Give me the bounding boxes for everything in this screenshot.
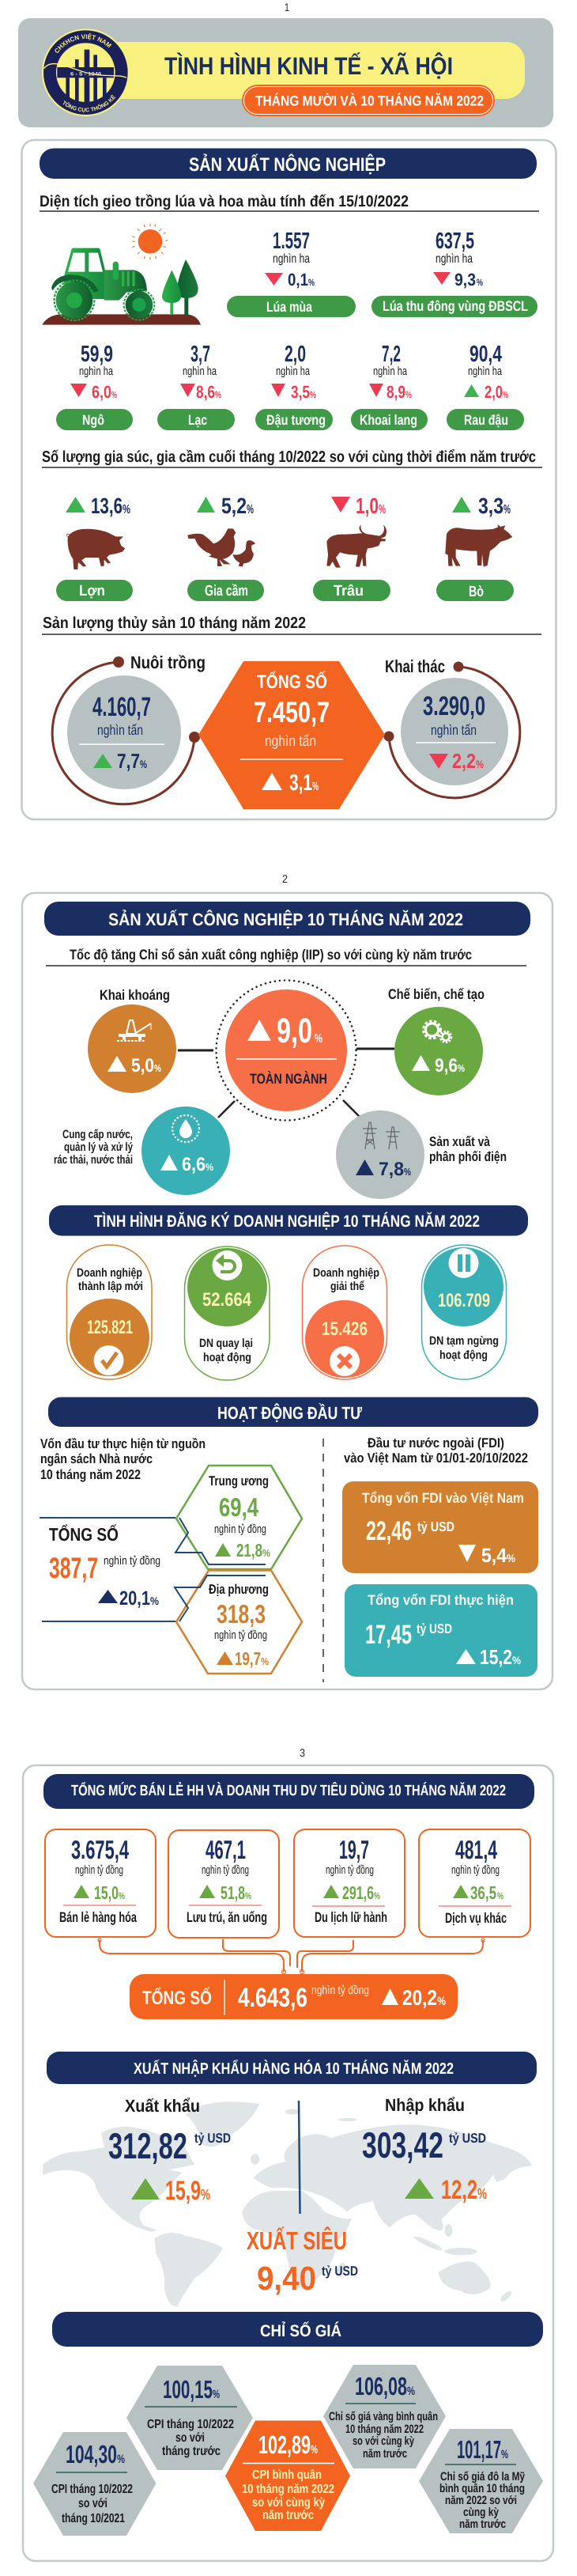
stat: fisheries total hexagon: nghìn tấn bbox=[265, 733, 316, 750]
stat: returning enterprises: hoạt động bbox=[203, 1351, 251, 1364]
panel: retail, trade, prices bbox=[23, 1765, 553, 2561]
stat: travel: nghìn tỷ đồng bbox=[326, 1863, 374, 1877]
page number 2: 2 bbox=[282, 872, 288, 885]
card: realised FDI: 17,45 bbox=[365, 1620, 412, 1650]
hexagon: CPI vs 10/2021: % bbox=[117, 2453, 125, 2466]
stat: Bò: 3,3 bbox=[478, 494, 503, 518]
chart: central IIP circle: % bbox=[315, 1032, 322, 1046]
card: total FDI: % bbox=[507, 1552, 515, 1564]
stat: Gia cầm: Gia cầm bbox=[205, 583, 248, 600]
heading: price index: CHỈ SỐ GIÁ bbox=[260, 2321, 341, 2340]
stat: Lạc bbox=[157, 342, 235, 430]
stat: water and waste: 6,6 bbox=[182, 1154, 206, 1175]
heading: agriculture bbox=[40, 149, 537, 179]
stat: total investment: nghìn tỷ đồng bbox=[104, 1554, 160, 1568]
stat: electricity: Sản xuất và bbox=[429, 1134, 490, 1149]
stat: Lúa thu đông: 9,3 bbox=[454, 270, 476, 289]
heading: agriculture: SẢN XUẤT NÔNG NGHIỆP bbox=[189, 153, 386, 176]
hexagon: CPI vs 10/2021: tháng 10/2021 bbox=[62, 2512, 125, 2525]
heading: retail bbox=[43, 1774, 534, 1809]
text: FDI heading: Đầu tư nước ngoài (FDI) bbox=[368, 1436, 504, 1451]
hexagon: CPI vs previous month bbox=[126, 2366, 253, 2470]
stat: Khoai lang: % bbox=[405, 389, 412, 400]
heading: trade: XUẤT NHẬP KHẨU HÀNG HÓA 10 THÁNG NĂM 2022 bbox=[134, 2060, 454, 2078]
stat: retail goods: nghìn tỷ đồng bbox=[75, 1863, 123, 1877]
hexagon: average CPI: 10 tháng năm 2022 bbox=[242, 2483, 334, 2496]
hexagon: central budget: 69,4 bbox=[219, 1492, 258, 1522]
stat: retail total: TỔNG SỐ bbox=[142, 1987, 212, 2009]
hexagon: CPI vs previous month: % bbox=[213, 2388, 220, 2401]
stat: Lúa thu đông: % bbox=[477, 277, 483, 288]
stat: accommodation and food: Lưu trú, ăn uống bbox=[187, 1909, 267, 1925]
stat: Rau đậu: nghìn ha bbox=[468, 365, 502, 378]
stat: Lạc: 8,6 bbox=[196, 382, 215, 402]
hexagon: USD price index: bình quân 10 tháng bbox=[439, 2482, 525, 2495]
heading: investment: HOẠT ĐỘNG ĐẦU TƯ bbox=[217, 1403, 363, 1423]
stat: Bò: Bò bbox=[469, 584, 484, 600]
stat: total investment: % bbox=[150, 1594, 159, 1607]
hexagon: USD price index: Chỉ số giá đô la Mỹ bbox=[440, 2470, 526, 2483]
hexagon: local budget: nghìn tỷ đồng bbox=[214, 1628, 267, 1642]
card: realised FDI: tỷ USD bbox=[417, 1621, 452, 1636]
stat: retail goods: % bbox=[119, 1890, 125, 1901]
hexagon: CPI vs 10/2021 bbox=[33, 2432, 157, 2536]
stat: total investment: 387,7 bbox=[49, 1552, 98, 1584]
stat: aquaculture circle: 4.160,7 bbox=[92, 692, 151, 722]
stat: mining: % bbox=[154, 1062, 161, 1074]
stat: Lúa thu đông: Lúa thu đông vùng ĐBSCL bbox=[383, 298, 528, 314]
stat: new enterprises: 125.821 bbox=[87, 1317, 133, 1338]
hexagon: average CPI bbox=[225, 2420, 350, 2531]
stat: Rau đậu: Rau đậu bbox=[464, 412, 508, 428]
stat: capture fisheries circle: nghìn tấn bbox=[431, 722, 477, 738]
stat: Lúa mùa: 1.557 bbox=[273, 229, 310, 254]
heading: investment bbox=[48, 1397, 538, 1427]
card: total FDI: 5,4 bbox=[481, 1545, 507, 1567]
header banner bbox=[18, 18, 553, 127]
stat: travel: % bbox=[374, 1890, 380, 1901]
stat: Đậu tương: Đậu tương bbox=[266, 412, 326, 428]
stat: returning enterprises bbox=[185, 1246, 270, 1380]
card: total FDI: tỷ USD bbox=[417, 1519, 454, 1534]
stat: Ngô bbox=[56, 342, 133, 430]
hexagon: central budget: nghìn tỷ đồng bbox=[214, 1523, 266, 1536]
stat: returning enterprises: DN quay lại bbox=[199, 1337, 253, 1350]
icon: pause bbox=[449, 1248, 479, 1278]
stat: water and waste: rác thải, nước thải bbox=[54, 1153, 133, 1167]
stat: suspended enterprises: 106.709 bbox=[438, 1290, 490, 1311]
stat: retail goods: 3.675,4 bbox=[71, 1835, 129, 1864]
hexagon: gold price index: năm trước bbox=[363, 2447, 407, 2461]
card: total FDI: Tổng vốn FDI vào Việt Nam bbox=[362, 1490, 524, 1506]
stat: Lạc: % bbox=[215, 389, 221, 400]
stat: capture fisheries circle: 3.290,0 bbox=[423, 691, 485, 721]
stat: other services: 36,5 bbox=[470, 1882, 496, 1903]
hexagon: local budget: % bbox=[261, 1655, 269, 1667]
stat: Trâu: Trâu bbox=[334, 583, 364, 600]
stat: Đậu tương: 2,0 bbox=[285, 342, 306, 367]
stat: Rau đậu bbox=[447, 342, 524, 430]
hexagon: gold price index bbox=[323, 2365, 446, 2468]
stat: suspended enterprises: hoạt động bbox=[439, 1349, 488, 1362]
stat: Bò: % bbox=[503, 503, 511, 516]
stat: exports: 15,9 bbox=[165, 2176, 201, 2206]
stat: Lạc: 3,7 bbox=[190, 342, 210, 367]
stat: Rau đậu: 2,0 bbox=[485, 382, 503, 402]
text: state budget investment: 10 tháng năm 2022 bbox=[40, 1467, 141, 1482]
stat: aquaculture circle bbox=[52, 653, 206, 804]
stat: Rau đậu: 90,4 bbox=[470, 342, 502, 367]
stat: Trâu: 1,0 bbox=[356, 494, 379, 518]
stat: retail total: % bbox=[437, 1995, 446, 2008]
hexagon: local budget bbox=[176, 1571, 302, 1674]
hexagon: gold price index: so với cùng kỳ bbox=[353, 2434, 414, 2448]
stat: manufacturing: 9,6 bbox=[435, 1055, 458, 1076]
hexagon: central budget bbox=[176, 1466, 302, 1569]
stat: accommodation and food: 467,1 bbox=[206, 1835, 246, 1864]
stat: Lợn: Lợn bbox=[79, 583, 105, 600]
stat: accommodation and food: nghìn tỷ đồng bbox=[202, 1863, 249, 1877]
heading: enterprise registration: TÌNH HÌNH ĐĂNG KÝ DOANH NGHIỆP 10 THÁNG NĂM 2022 bbox=[94, 1212, 480, 1231]
hexagon: USD price index: 101,17 bbox=[457, 2435, 501, 2464]
stat: Lạc: Lạc bbox=[188, 412, 207, 428]
stat: retail goods bbox=[45, 1829, 156, 1937]
subheading: planted area: Diện tích gieo trồng lúa và hoa màu tính đến 15/10/2022 bbox=[40, 193, 409, 210]
stat: new enterprises bbox=[66, 1245, 152, 1379]
hexagon: USD price index: % bbox=[501, 2448, 508, 2461]
stat: accommodation and food bbox=[168, 1830, 279, 1938]
hexagon: USD price index: cùng kỳ bbox=[463, 2506, 500, 2519]
stat: electricity: 7,8 bbox=[379, 1159, 404, 1180]
stat: Khoai lang bbox=[351, 342, 428, 430]
stat: retail total: 4.643,6 bbox=[238, 1983, 307, 2013]
stat: Khoai lang: 7,2 bbox=[382, 342, 401, 367]
hexagon: USD price index: năm 2022 so với bbox=[445, 2494, 517, 2507]
hexagon: central budget: Trung ương bbox=[209, 1473, 269, 1488]
icon: buffalo bbox=[326, 524, 387, 568]
stat: manufacturing: Chế biến, chế tạo bbox=[388, 986, 485, 1002]
hexagon: gold price index: % bbox=[407, 2385, 415, 2398]
stat: Ngô: 6,0 bbox=[92, 382, 111, 402]
page number 1: 1 bbox=[285, 1, 289, 13]
stat: Lúa mùa: % bbox=[308, 277, 315, 288]
hexagon: average CPI: CPI bình quân bbox=[252, 2468, 322, 2482]
stat: trade surplus bbox=[247, 2226, 358, 2297]
stat: dissolved enterprises bbox=[302, 1246, 387, 1379]
heading: trade bbox=[47, 2052, 537, 2084]
heading: industrial production bbox=[44, 902, 530, 936]
icon: statistics office logo: 6 - 5 - 1946 bbox=[70, 71, 101, 77]
hexagon: CPI vs 10/2021: 104,30 bbox=[66, 2440, 117, 2468]
stat: water and waste: quản lý và xử lý bbox=[64, 1140, 133, 1154]
stat: Lúa mùa: Lúa mùa bbox=[266, 299, 313, 315]
hexagon: local budget: 318,3 bbox=[217, 1599, 266, 1628]
stat: exports: tỷ USD bbox=[194, 2131, 231, 2146]
stat: total investment: TỔNG SỐ bbox=[49, 1524, 119, 1545]
stat: Đậu tương: nghìn ha bbox=[276, 365, 310, 378]
panel: industry, enterprises, investment bbox=[22, 893, 552, 1689]
heading: industrial production: SẢN XUẤT CÔNG NGHIỆP 10 THÁNG NĂM 2022 bbox=[108, 910, 463, 929]
stat: Lúa mùa bbox=[227, 229, 356, 317]
stat: imports: Nhập khẩu bbox=[385, 2095, 465, 2115]
icon: tractor with sun and trees bbox=[42, 224, 201, 325]
stat: mining: Khai khoáng bbox=[100, 987, 170, 1003]
hexagon: average CPI: năm trước bbox=[262, 2509, 314, 2522]
stat: travel: Du lịch lữ hành bbox=[315, 1909, 387, 1925]
text: state budget investment bbox=[40, 1436, 206, 1482]
stat: capture fisheries circle: Khai thác bbox=[385, 656, 445, 676]
icon: check bbox=[93, 1345, 123, 1375]
stat: Ngô: 59,9 bbox=[81, 342, 113, 367]
stat: imports: 303,42 bbox=[362, 2124, 443, 2166]
stat: Ngô: Ngô bbox=[82, 412, 104, 428]
stat: trade surplus: XUẤT SIÊU bbox=[247, 2226, 347, 2255]
stat: manufacturing: % bbox=[458, 1062, 465, 1074]
stat: Lúa thu đông: 637,5 bbox=[436, 229, 474, 254]
hexagon: USD price index: năm trước bbox=[459, 2517, 506, 2531]
stat: Khoai lang: Khoai lang bbox=[360, 412, 417, 428]
stat: capture fisheries circle: 2,2 bbox=[452, 749, 476, 773]
stat: Lạc: nghìn ha bbox=[183, 365, 217, 378]
hexagon: average CPI: so với cùng kỳ bbox=[252, 2496, 325, 2510]
text: FDI heading: vào Việt Nam từ 01/01-20/10/2022 bbox=[344, 1451, 528, 1466]
stat: Bò bbox=[436, 494, 514, 601]
hexagon: central budget: 21,8 bbox=[236, 1540, 262, 1560]
icon: pig bbox=[66, 529, 125, 569]
subtitle pill: THÁNG MƯỜI VÀ 10 THÁNG NĂM 2022 bbox=[255, 93, 484, 109]
stat: total investment bbox=[49, 1524, 160, 1610]
hexagon: CPI vs previous month: tháng trước bbox=[162, 2445, 221, 2458]
icon: statistics office logo: TỔNG CỤC THỐNG KÊ bbox=[63, 95, 115, 112]
stat: water and waste bbox=[54, 1106, 230, 1195]
stat: fisheries total hexagon: TỔNG SỐ bbox=[257, 671, 327, 693]
chart: central IIP circle bbox=[217, 981, 356, 1120]
icon: return arrow bbox=[212, 1250, 242, 1280]
heading: enterprise registration bbox=[49, 1205, 528, 1235]
stat: returning enterprises: 52.664 bbox=[202, 1289, 252, 1311]
subheading: fisheries: Sản lượng thủy sản 10 tháng năm 2022 bbox=[43, 615, 306, 632]
connectors to total bbox=[98, 1939, 485, 1974]
stat: retail total: 20,2 bbox=[402, 1986, 437, 2010]
stat: Lợn: 13,6 bbox=[91, 494, 123, 518]
card: total FDI: 22,46 bbox=[366, 1516, 412, 1546]
stat: exports bbox=[108, 2096, 231, 2206]
stat: exports: Xuất khẩu bbox=[125, 2096, 200, 2116]
stat: capture fisheries circle: % bbox=[476, 758, 484, 770]
stat: suspended enterprises: DN tạm ngừng bbox=[429, 1334, 499, 1348]
stat: Ngô: nghìn ha bbox=[79, 365, 113, 378]
hexagon: local budget: Địa phương bbox=[209, 1582, 269, 1597]
stat: trade surplus: tỷ USD bbox=[322, 2264, 358, 2279]
icon: statistics office logo: CHXHCN VIỆT NAM bbox=[55, 33, 112, 53]
stat: dissolved enterprises: Doanh nghiệp bbox=[313, 1266, 379, 1280]
stat: Gia cầm bbox=[187, 494, 264, 601]
stat: fisheries total hexagon bbox=[198, 661, 385, 809]
icon: rooster and duck bbox=[187, 528, 255, 567]
stat: imports: tỷ USD bbox=[449, 2131, 486, 2146]
stat: imports: % bbox=[477, 2186, 487, 2203]
hexagon: CPI vs 10/2021: so với bbox=[78, 2497, 107, 2510]
hexagon: CPI vs previous month: 100,15 bbox=[163, 2375, 213, 2404]
stat: imports: 12,2 bbox=[441, 2175, 477, 2205]
stat: exports: 312,82 bbox=[108, 2125, 187, 2166]
text: FDI heading bbox=[344, 1436, 528, 1466]
stat: Đậu tương bbox=[255, 342, 333, 430]
stat: Khoai lang: nghìn ha bbox=[373, 365, 407, 378]
page number 3: 3 bbox=[300, 1746, 305, 1759]
hexagon: CPI vs previous month: so với bbox=[175, 2431, 205, 2445]
hexagon: average CPI: % bbox=[311, 2443, 318, 2457]
stat: imports bbox=[362, 2095, 487, 2205]
hexagon: gold price index: Chỉ số giá vàng bình quân bbox=[329, 2410, 438, 2423]
panel: agriculture bbox=[22, 140, 556, 819]
stat: Ngô: % bbox=[111, 389, 117, 400]
card: total FDI bbox=[342, 1481, 538, 1573]
stat: new enterprises: thành lập mới bbox=[78, 1280, 143, 1293]
chart: central IIP circle: 9,0 bbox=[277, 1012, 312, 1050]
stat: retail total: nghìn tỷ đồng bbox=[311, 1984, 369, 1997]
stat: other services: % bbox=[497, 1890, 503, 1901]
stat: Gia cầm: % bbox=[247, 503, 254, 516]
stat: travel bbox=[294, 1829, 405, 1937]
stat: retail goods: Bán lẻ hàng hóa bbox=[59, 1909, 138, 1925]
stat: Đậu tương: % bbox=[310, 389, 316, 400]
stat: water and waste: % bbox=[206, 1161, 213, 1173]
stat: Khoai lang: 8,9 bbox=[387, 382, 405, 402]
stat: Lợn: % bbox=[123, 503, 130, 516]
hexagon: gold price index: 10 tháng năm 2022 bbox=[345, 2423, 424, 2436]
stat: other services: nghìn tỷ đồng bbox=[451, 1863, 500, 1877]
stat: travel: 19,7 bbox=[339, 1835, 369, 1864]
stat: Lúa mùa: nghìn ha bbox=[273, 252, 310, 266]
stat: fisheries total hexagon: 7.450,7 bbox=[254, 696, 330, 728]
heading: price index bbox=[52, 2312, 543, 2347]
hexagon: central budget: % bbox=[262, 1547, 270, 1559]
stat: aquaculture circle: 7,7 bbox=[117, 749, 140, 773]
subheading: IIP: Tốc độ tăng Chỉ số sản xuất công nghiệp (IIP) so với cùng kỳ năm trước bbox=[70, 947, 472, 963]
stat: travel: 291,6 bbox=[342, 1882, 374, 1903]
hexagon: average CPI: 102,89 bbox=[258, 2430, 311, 2459]
hexagon: local budget: 19,7 bbox=[235, 1648, 261, 1669]
icon: cross bbox=[330, 1346, 360, 1376]
stat: Trâu bbox=[313, 494, 390, 601]
stat: fisheries total hexagon: % bbox=[312, 780, 319, 793]
stat: retail total bbox=[130, 1974, 458, 2019]
title: TÌNH HÌNH KINH TẾ - XÃ HỘI bbox=[164, 52, 453, 80]
stat: electricity: phân phối điện bbox=[429, 1149, 507, 1164]
stat: electricity bbox=[336, 1110, 507, 1199]
hexagon: CPI vs 10/2021: CPI tháng 10/2022 bbox=[51, 2483, 133, 2496]
hexagon: USD price index bbox=[419, 2429, 543, 2533]
stat: capture fisheries circle bbox=[384, 656, 520, 798]
stat: other services bbox=[419, 1829, 530, 1937]
stat: Gia cầm: 5,2 bbox=[221, 494, 247, 518]
card: realised FDI: % bbox=[512, 1654, 521, 1666]
stat: total investment: 20,1 bbox=[119, 1587, 150, 1610]
stat: exports: % bbox=[201, 2187, 210, 2203]
stat: manufacturing bbox=[388, 986, 485, 1095]
hexagon: gold price index: 106,08 bbox=[355, 2372, 407, 2400]
stat: retail goods: 15,0 bbox=[94, 1882, 119, 1903]
hexagon: CPI vs previous month: CPI tháng 10/2022 bbox=[147, 2418, 234, 2431]
stat: other services: 481,4 bbox=[455, 1835, 497, 1864]
stat: other services: Dịch vụ khác bbox=[445, 1910, 507, 1926]
stat: new enterprises: Doanh nghiệp bbox=[77, 1266, 142, 1280]
stat: aquaculture circle: nghìn tấn bbox=[97, 722, 143, 738]
stat: accommodation and food: % bbox=[245, 1890, 251, 1901]
stat: dissolved enterprises: giải thể bbox=[330, 1280, 364, 1293]
stat: aquaculture circle: Nuôi trồng bbox=[130, 653, 206, 672]
stat: Lúa thu đông: nghìn ha bbox=[436, 252, 473, 266]
icon: gears bbox=[424, 1021, 451, 1042]
stat: electricity: % bbox=[404, 1166, 411, 1178]
stat: mining: 5,0 bbox=[131, 1055, 154, 1076]
stat: trade surplus: 9,40 bbox=[257, 2260, 316, 2297]
card: realised FDI: Tổng vốn FDI thực hiện bbox=[368, 1592, 514, 1608]
stat: accommodation and food: 51,8 bbox=[221, 1882, 245, 1903]
chart: central IIP circle: TOÀN NGÀNH bbox=[250, 1071, 327, 1087]
chart: world map background bbox=[43, 2101, 532, 2307]
card: realised FDI bbox=[345, 1584, 537, 1677]
stat: Lúa thu đông bbox=[371, 229, 537, 317]
icon: oil rig bbox=[117, 1020, 151, 1041]
stat: Rau đậu: % bbox=[503, 389, 508, 400]
icon: power towers bbox=[363, 1122, 400, 1149]
stat: dissolved enterprises: 15.426 bbox=[322, 1318, 368, 1340]
card: realised FDI: 15,2 bbox=[480, 1645, 512, 1669]
text: state budget investment: Vốn đầu tư thực hiện từ nguồn bbox=[40, 1436, 206, 1451]
icon: cow bbox=[445, 524, 512, 567]
icon: water drop bbox=[172, 1115, 199, 1142]
text: state budget investment: ngân sách Nhà nước bbox=[40, 1451, 153, 1466]
stat: Lợn bbox=[56, 494, 133, 601]
stat: Lúa mùa: 0,1 bbox=[288, 270, 308, 289]
stat: Đậu tương: 3,5 bbox=[291, 382, 310, 402]
stat: fisheries total hexagon: 3,1 bbox=[289, 770, 312, 796]
subtitle pill bbox=[242, 85, 495, 116]
stat: Trâu: % bbox=[379, 503, 386, 516]
stat: mining bbox=[88, 987, 176, 1093]
icon: statistics office logo bbox=[42, 28, 128, 116]
stat: aquaculture circle: % bbox=[140, 758, 147, 770]
stat: water and waste: Cung cấp nước, bbox=[62, 1128, 133, 1141]
stat: suspended enterprises bbox=[422, 1245, 506, 1379]
